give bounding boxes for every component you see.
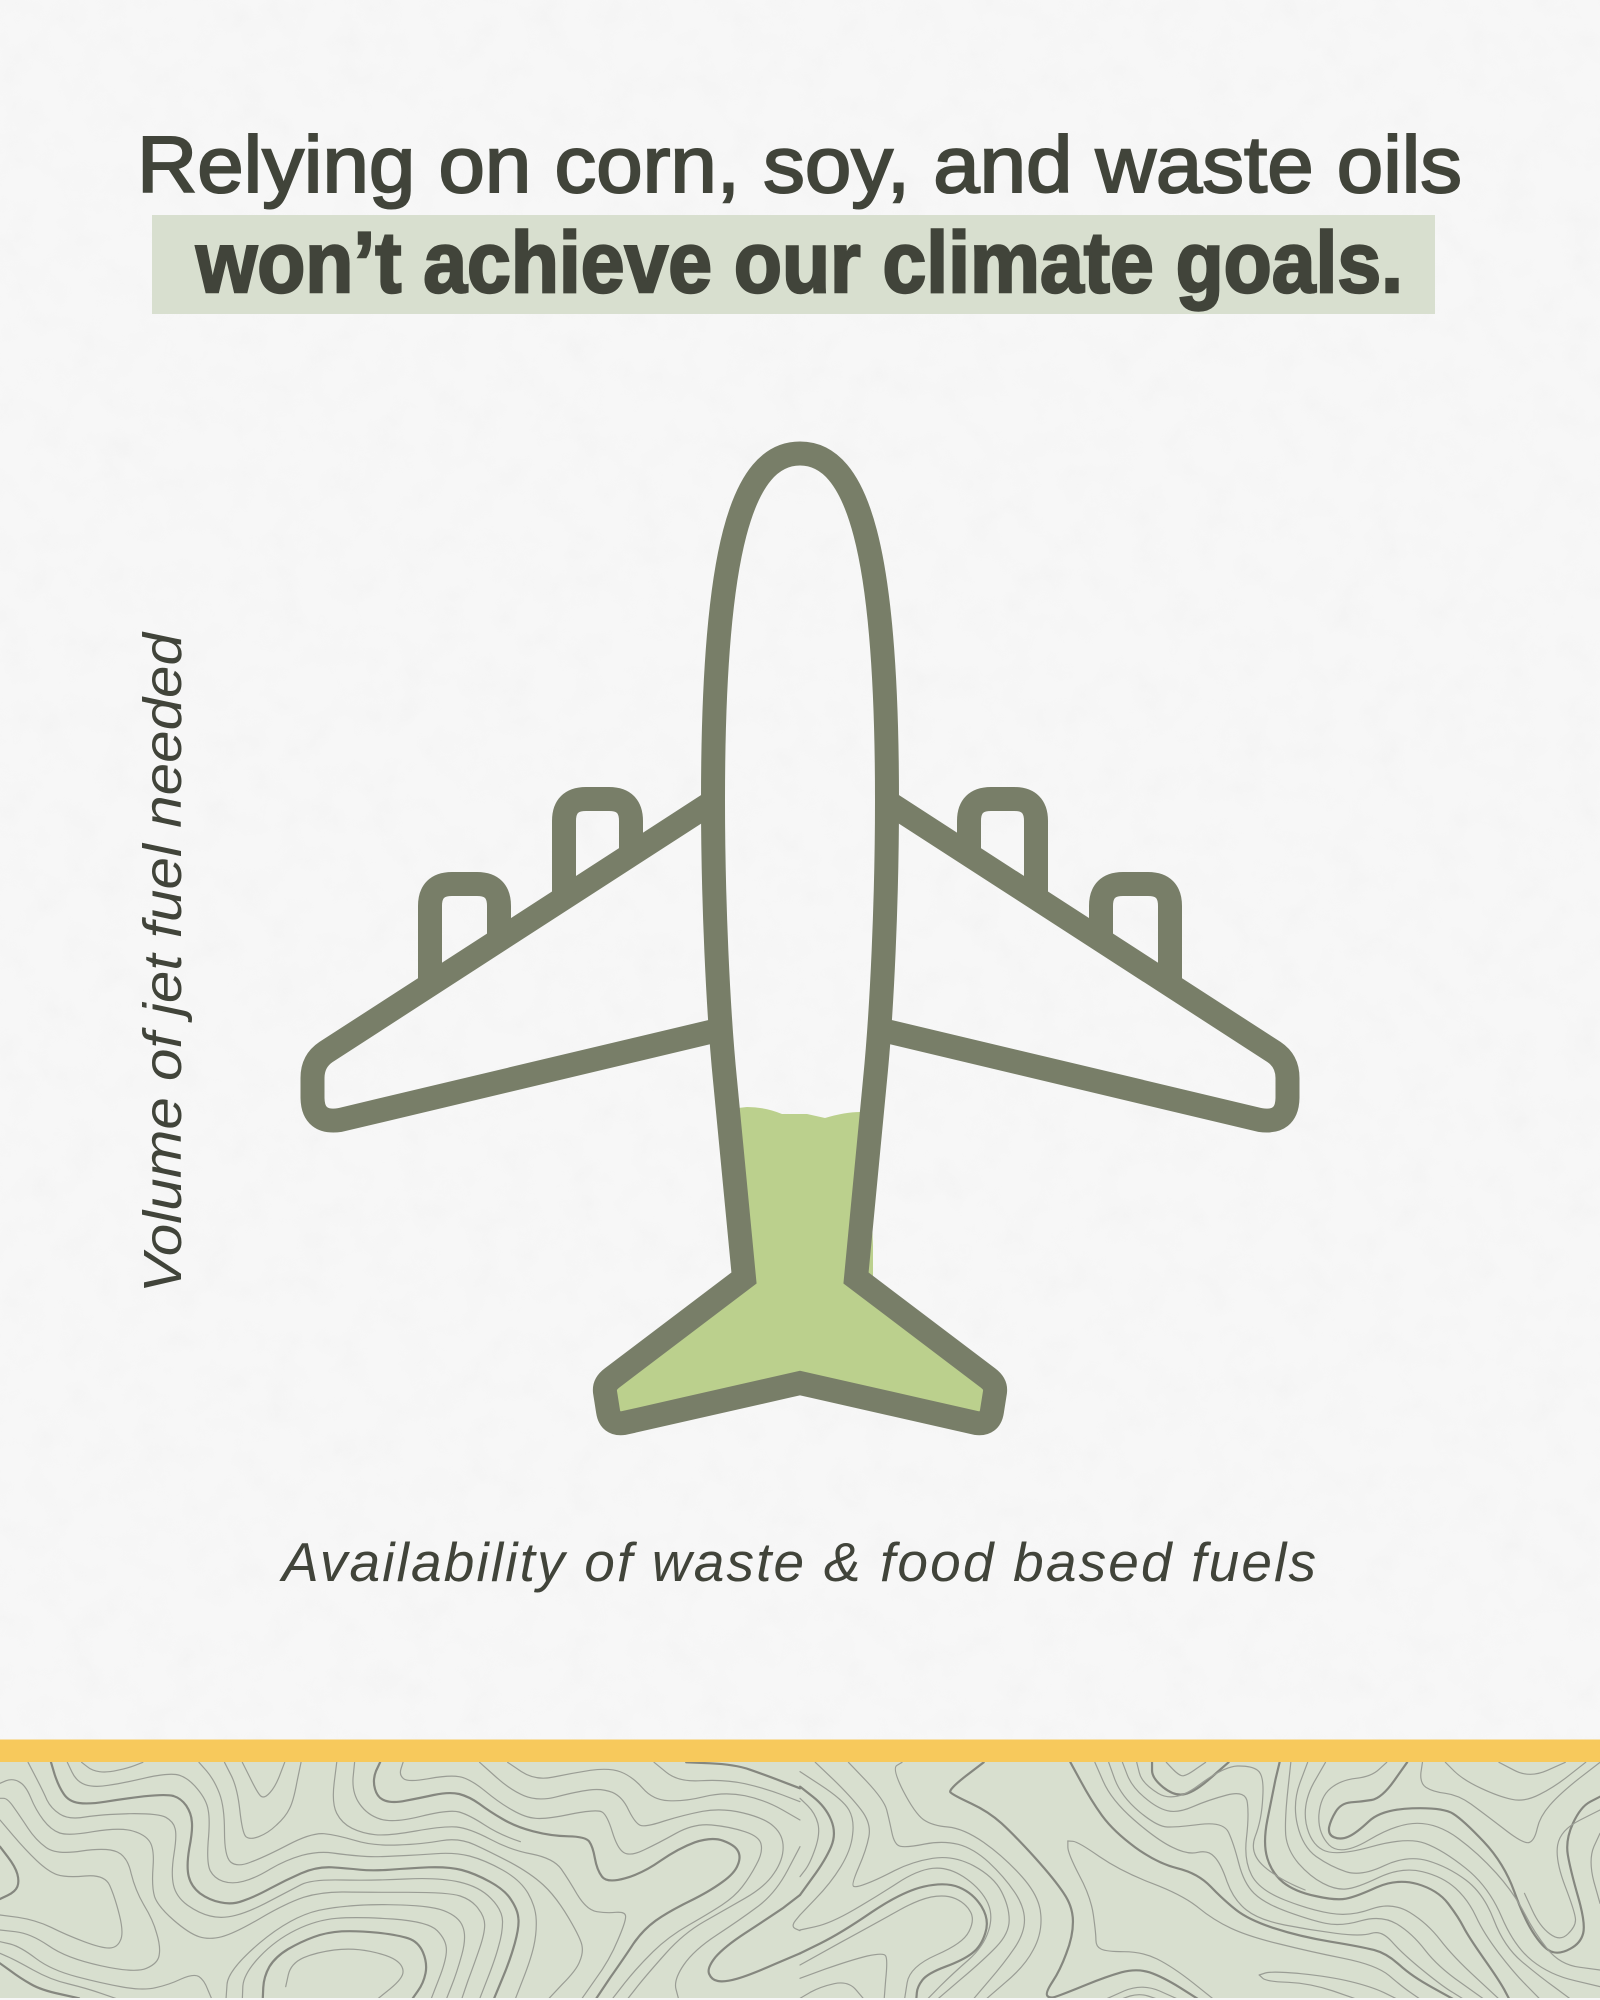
title [137,120,1462,314]
title line 1: Relying on corn, soy, and waste oils [137,120,1462,209]
airplane icon [312,454,1288,1423]
footer yellow stripe [0,1740,1600,1762]
fuel level fill [610,1107,1000,1420]
x axis label: availability of waste and food based fuels: Availability of waste & food based fuels [279,1531,1316,1593]
footer topographic band [0,1762,1600,1999]
right inner engine [969,799,1036,903]
left wing [312,801,714,1121]
title line 2: won’t achieve our climate goals. [195,215,1403,311]
right outer engine [1101,884,1170,990]
contour lines left half [0,1762,800,1999]
left inner engine [564,799,631,903]
fuselage and tail outline [605,454,995,1423]
right wing [886,801,1288,1121]
title highlight band [152,215,1435,314]
contour lines right half [800,1762,1600,1999]
y axis label: volume of jet fuel needed: Volume of jet fuel needed [133,631,193,1293]
left outer engine [430,884,499,990]
